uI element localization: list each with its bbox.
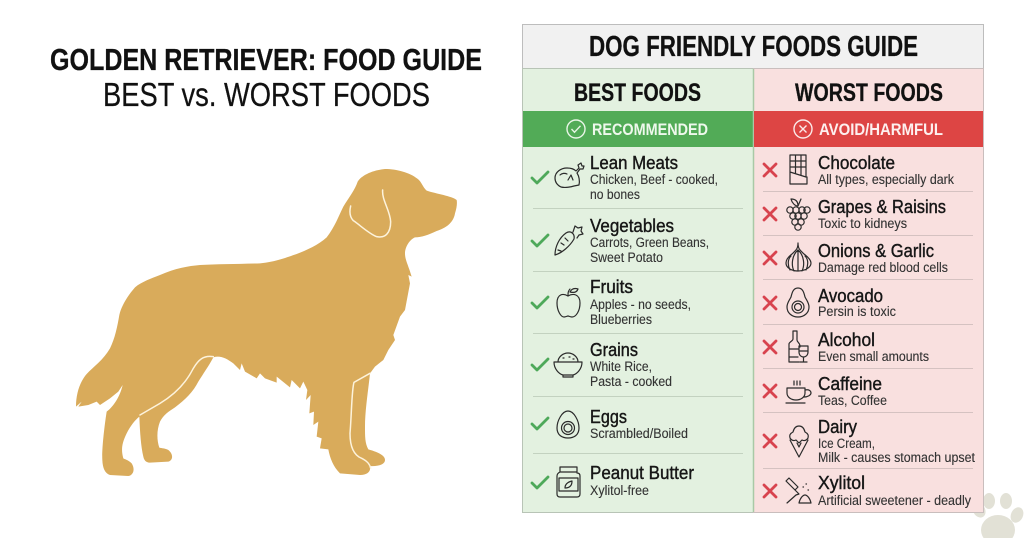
item: caffeine: Caffeine xyxy=(818,374,882,394)
badge: avoid: AVOID/HARMFUL xyxy=(819,120,943,139)
item: dairy xyxy=(764,417,975,465)
item: grapes: Toxic to kidneys xyxy=(818,216,907,231)
item: eggs xyxy=(532,407,688,441)
item: dairy: Milk - causes stomach upset xyxy=(818,450,975,465)
item: dairy: Ice Cream, xyxy=(818,436,875,451)
item: fruits: Apples - no seeds, xyxy=(590,297,691,312)
heading: worst foods: WORST FOODS xyxy=(795,79,943,107)
item: grapes: Grapes & Raisins xyxy=(818,197,946,217)
item: chocolate xyxy=(764,153,954,187)
item: peanut butter xyxy=(532,463,694,498)
item: avocado xyxy=(764,286,896,319)
item: eggs: Eggs xyxy=(590,407,627,427)
item: lean meats xyxy=(532,153,718,202)
item: vegetables xyxy=(532,216,709,265)
badge: avoid xyxy=(754,111,983,147)
item: fruits: Blueberries xyxy=(590,312,652,327)
item: fruits xyxy=(532,277,691,327)
heading: best foods: BEST FOODS xyxy=(574,79,701,107)
item: chocolate: Chocolate xyxy=(818,153,895,173)
item: xylitol xyxy=(764,473,971,508)
panel: best foods column xyxy=(522,68,754,512)
item: grains: White Rice, xyxy=(590,359,652,374)
item: onions xyxy=(764,241,948,275)
panel header xyxy=(522,24,984,68)
item: onions: Onions & Garlic xyxy=(818,241,934,261)
panel: food guide table xyxy=(522,24,984,512)
icon: paw print watermark xyxy=(970,493,1024,538)
item: lean meats: Lean Meats xyxy=(590,153,678,173)
item: grains: Pasta - cooked xyxy=(590,374,672,389)
item: peanut butter: Peanut Butter xyxy=(590,463,694,483)
item: onions: Damage red blood cells xyxy=(818,260,948,275)
item: avocado: Avocado xyxy=(818,286,883,306)
title xyxy=(50,42,482,113)
panel header: DOG FRIENDLY FOODS GUIDE xyxy=(589,31,918,63)
item: chocolate: All types, especially dark xyxy=(818,172,954,187)
item: alcohol: Even small amounts xyxy=(818,349,929,364)
illustration: golden retriever silhouette xyxy=(76,169,457,476)
badge: recommended: RECOMMENDED xyxy=(592,120,708,139)
panel: worst foods column xyxy=(754,68,984,512)
item: xylitol: Xylitol xyxy=(818,473,865,493)
item: caffeine xyxy=(764,374,887,408)
item: vegetables: Sweet Potato xyxy=(590,250,663,265)
item: fruits: Fruits xyxy=(590,277,633,297)
item: caffeine: Teas, Coffee xyxy=(818,393,887,408)
item: vegetables: Vegetables xyxy=(590,216,674,236)
item: grapes xyxy=(764,197,946,231)
item: peanut butter: Xylitol-free xyxy=(590,483,649,498)
item: xylitol: Artificial sweetener - deadly xyxy=(818,493,971,508)
badge: recommended xyxy=(523,111,753,147)
item: eggs: Scrambled/Boiled xyxy=(590,426,688,441)
item: lean meats: no bones xyxy=(590,187,640,202)
item: grains: Grains xyxy=(590,340,638,360)
item: alcohol: Alcohol xyxy=(818,330,875,350)
item: alcohol xyxy=(764,330,929,364)
item: lean meats: Chicken, Beef - cooked, xyxy=(590,172,718,187)
title: BEST vs. WORST FOODS xyxy=(103,76,430,113)
item: dairy: Dairy xyxy=(818,417,857,437)
item: grains xyxy=(532,340,672,389)
title: GOLDEN RETRIEVER: FOOD GUIDE xyxy=(50,42,482,77)
item: vegetables: Carrots, Green Beans, xyxy=(590,235,709,250)
item: avocado: Persin is toxic xyxy=(818,304,896,319)
